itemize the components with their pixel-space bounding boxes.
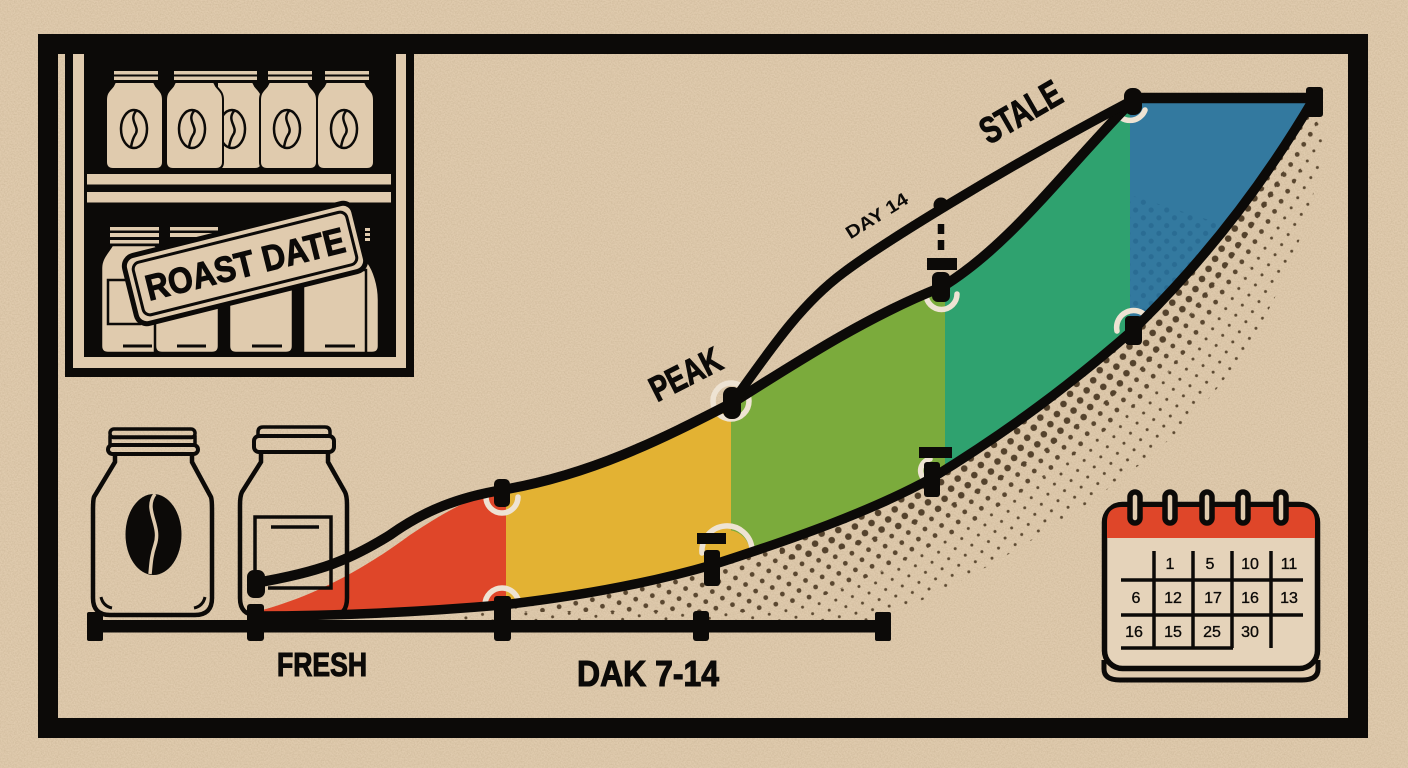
band: peak green — [731, 296, 945, 546]
label: peak: PEAK — [643, 340, 728, 409]
day 14 branch curve — [732, 100, 1133, 403]
band: yellow — [506, 413, 731, 600]
roast date stamp: ROAST DATE — [141, 219, 349, 309]
icon: coffee bean — [126, 494, 182, 575]
node halos — [485, 110, 1147, 605]
label: days 7-14: DAK 7-14 — [577, 653, 719, 694]
calendar grid — [1121, 551, 1303, 648]
curve nodes — [247, 87, 1323, 598]
day 14 dashed drop — [938, 224, 944, 252]
calendar numbers: 17 — [1204, 590, 1222, 607]
calendar header — [1107, 507, 1315, 538]
icon: calendar — [1104, 492, 1318, 680]
timeline axis — [87, 596, 891, 641]
yellow inset inside the halo — [731, 530, 749, 554]
calendar numbers: 1 — [1166, 556, 1175, 573]
calendar numbers: 5 — [1206, 556, 1215, 573]
calendar numbers: 13 — [1280, 590, 1298, 607]
lower curve — [255, 100, 1313, 616]
shelf boards — [87, 174, 391, 202]
calendar numbers: 16 — [1241, 590, 1259, 607]
roast date stamp — [122, 201, 368, 326]
upper curve — [255, 100, 1133, 583]
label: day 14: DAY 14 — [842, 189, 912, 243]
band: teal — [945, 113, 1130, 464]
calendar numbers: 15 — [1164, 624, 1182, 641]
calendar numbers: 12 — [1164, 590, 1182, 607]
halftone on blue band — [1130, 196, 1216, 311]
halftone shadow under the curve — [430, 100, 1326, 622]
bottom row of jars — [101, 227, 379, 353]
top row of jars — [106, 71, 374, 169]
band: fresh red — [264, 496, 506, 612]
label: fresh: FRESH — [277, 646, 367, 683]
calendar numbers: 11 — [1281, 556, 1297, 573]
calendar numbers: 6 — [1132, 590, 1141, 607]
calendar numbers — [1125, 556, 1298, 641]
chart: freshness bands — [250, 90, 1320, 630]
calendar numbers: 30 — [1241, 624, 1259, 641]
jar with bean — [93, 429, 212, 615]
top edge — [1133, 93, 1313, 103]
band: stale blue — [1130, 103, 1306, 316]
panel: shelf of coffee jars with roast date tag — [65, 44, 414, 377]
chart outlines — [255, 98, 1313, 616]
label: stale: STALE — [972, 72, 1069, 152]
jar with label — [240, 427, 347, 615]
calendar rings — [1130, 492, 1286, 523]
calendar numbers: 10 — [1241, 556, 1259, 573]
calendar numbers: 16 — [1125, 624, 1143, 641]
calendar numbers: 25 — [1203, 624, 1221, 641]
